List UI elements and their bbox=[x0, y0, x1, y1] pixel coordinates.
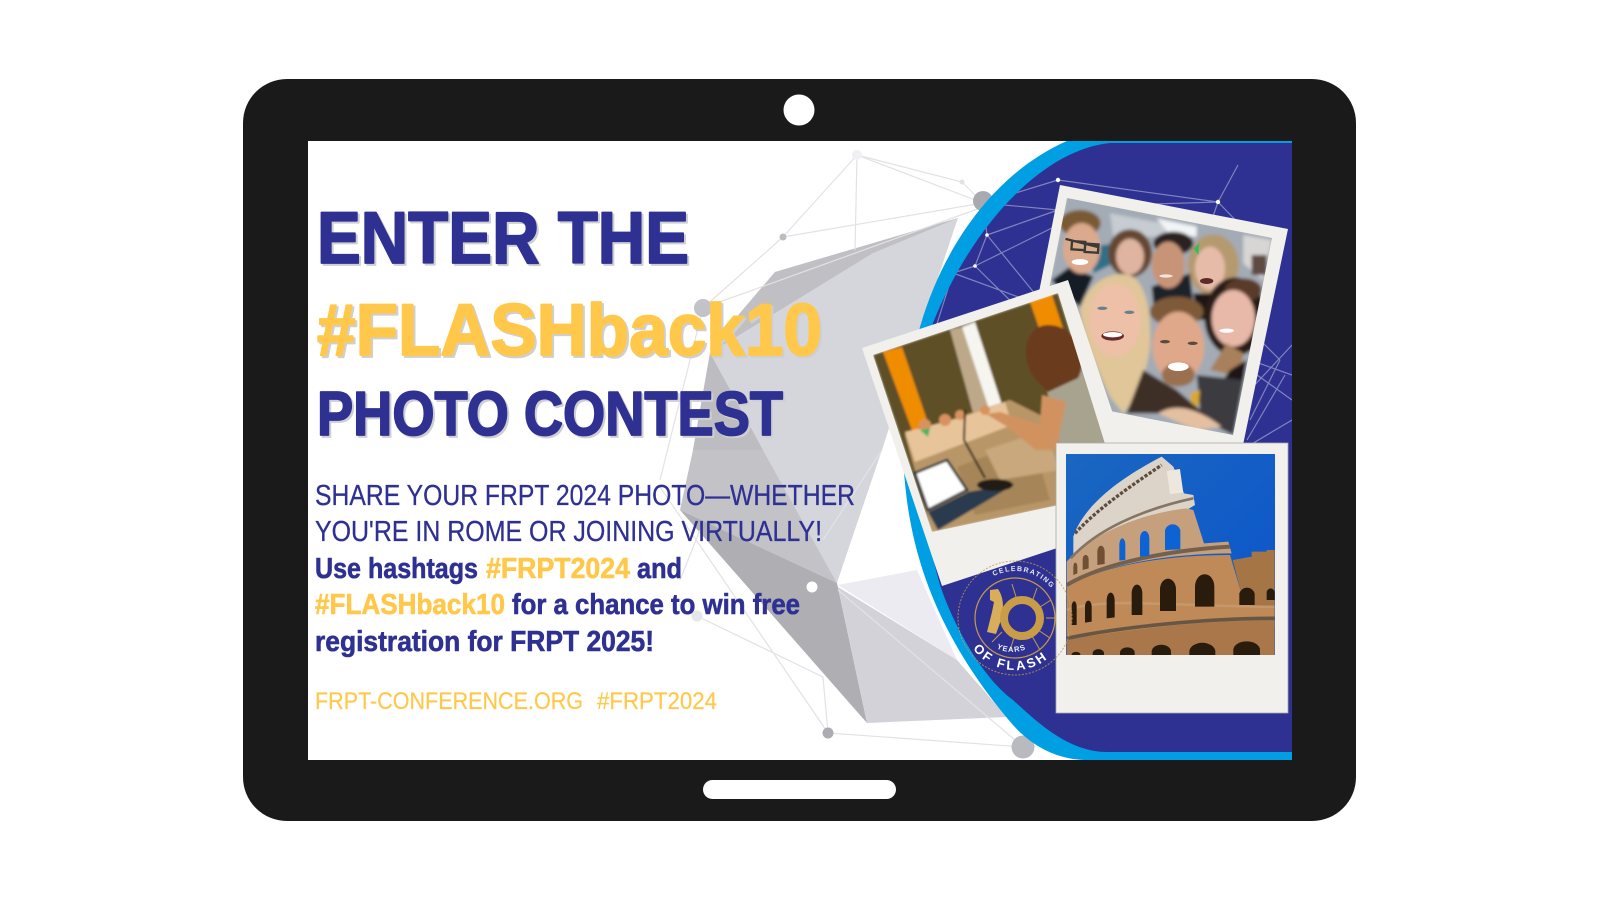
OF FLASH text: OF FLASH bbox=[974, 644, 1046, 670]
hashtag line 1: Use hashtags bbox=[315, 553, 478, 585]
mic bbox=[964, 410, 985, 478]
speaker frame bbox=[862, 280, 1148, 586]
numeral 0 ring bbox=[1004, 600, 1040, 636]
blue curved panel bbox=[903, 141, 1292, 760]
Colosseum second tier bbox=[1067, 555, 1275, 640]
camera bbox=[784, 94, 814, 126]
hashtag line 1 bbox=[315, 553, 682, 585]
white network on navy bbox=[935, 165, 1292, 445]
Colosseum third tier bbox=[1067, 508, 1232, 587]
grey polygon bbox=[680, 218, 1007, 723]
prize line: registration for FRPT 2025! bbox=[315, 626, 654, 658]
hashtag line 2: for a chance to win free bbox=[512, 589, 800, 621]
Colosseum frame bbox=[1056, 443, 1288, 713]
navy fill bbox=[917, 143, 1292, 752]
Colosseum first tier bbox=[1067, 620, 1275, 655]
badge rays bbox=[992, 584, 1056, 650]
speaker woman bbox=[1046, 366, 1104, 443]
home button bbox=[703, 780, 896, 799]
badge rings bbox=[958, 561, 1072, 675]
tablet bbox=[243, 79, 1356, 821]
tablet bezel bbox=[243, 79, 1356, 821]
website and hashtag: FRPT-CONFERENCE.ORG bbox=[315, 688, 583, 715]
grey network lines and nodes bbox=[660, 150, 1034, 758]
hashtag line 2 bbox=[315, 589, 800, 621]
headline bbox=[317, 198, 822, 449]
headline line 2: #FLASHback10 bbox=[317, 290, 822, 371]
screen bbox=[308, 141, 1292, 760]
headline line 1: ENTER THE bbox=[317, 198, 689, 279]
selfie photo bbox=[1050, 198, 1272, 435]
website and hashtag: #FRPT2024 bbox=[597, 688, 717, 715]
polaroid: group selfie bbox=[1040, 185, 1288, 443]
selfie frame bbox=[1010, 185, 1288, 470]
Colosseum photo bbox=[1066, 454, 1275, 655]
numeral 1 bbox=[987, 589, 1003, 634]
Colosseum cornices bbox=[1067, 465, 1275, 638]
10 years of FLASH badge bbox=[958, 560, 1072, 676]
speaker photo bbox=[873, 293, 1120, 532]
intro line 1: SHARE YOUR FRPT 2024 PHOTO—WHETHER bbox=[315, 480, 855, 512]
polaroid: Colosseum bbox=[1056, 443, 1288, 713]
Colosseum attic tier bbox=[1073, 457, 1195, 560]
body copy bbox=[315, 480, 855, 658]
YEARS text: YEARS bbox=[998, 644, 1025, 652]
Colosseum upper arches showing sky bbox=[1119, 524, 1180, 561]
right ruin bbox=[1233, 550, 1275, 607]
hashtag line 2: #FLASHback10 bbox=[315, 589, 505, 621]
laptop bbox=[915, 460, 967, 510]
headline line 3: PHOTO CONTEST bbox=[317, 380, 783, 449]
polaroid: speaker at podium bbox=[862, 280, 1112, 586]
low-poly background bbox=[660, 150, 1034, 758]
hashtag line 1: and bbox=[637, 553, 682, 585]
Colosseum middle arches bbox=[1072, 574, 1275, 655]
CELEBRATING text: CELEBRATING bbox=[992, 566, 1054, 587]
hashtag line 1: #FRPT2024 bbox=[486, 553, 630, 585]
cyan edge bbox=[903, 141, 1292, 760]
intro line 2: YOU'RE IN ROME OR JOINING VIRTUALLY! bbox=[315, 516, 822, 548]
